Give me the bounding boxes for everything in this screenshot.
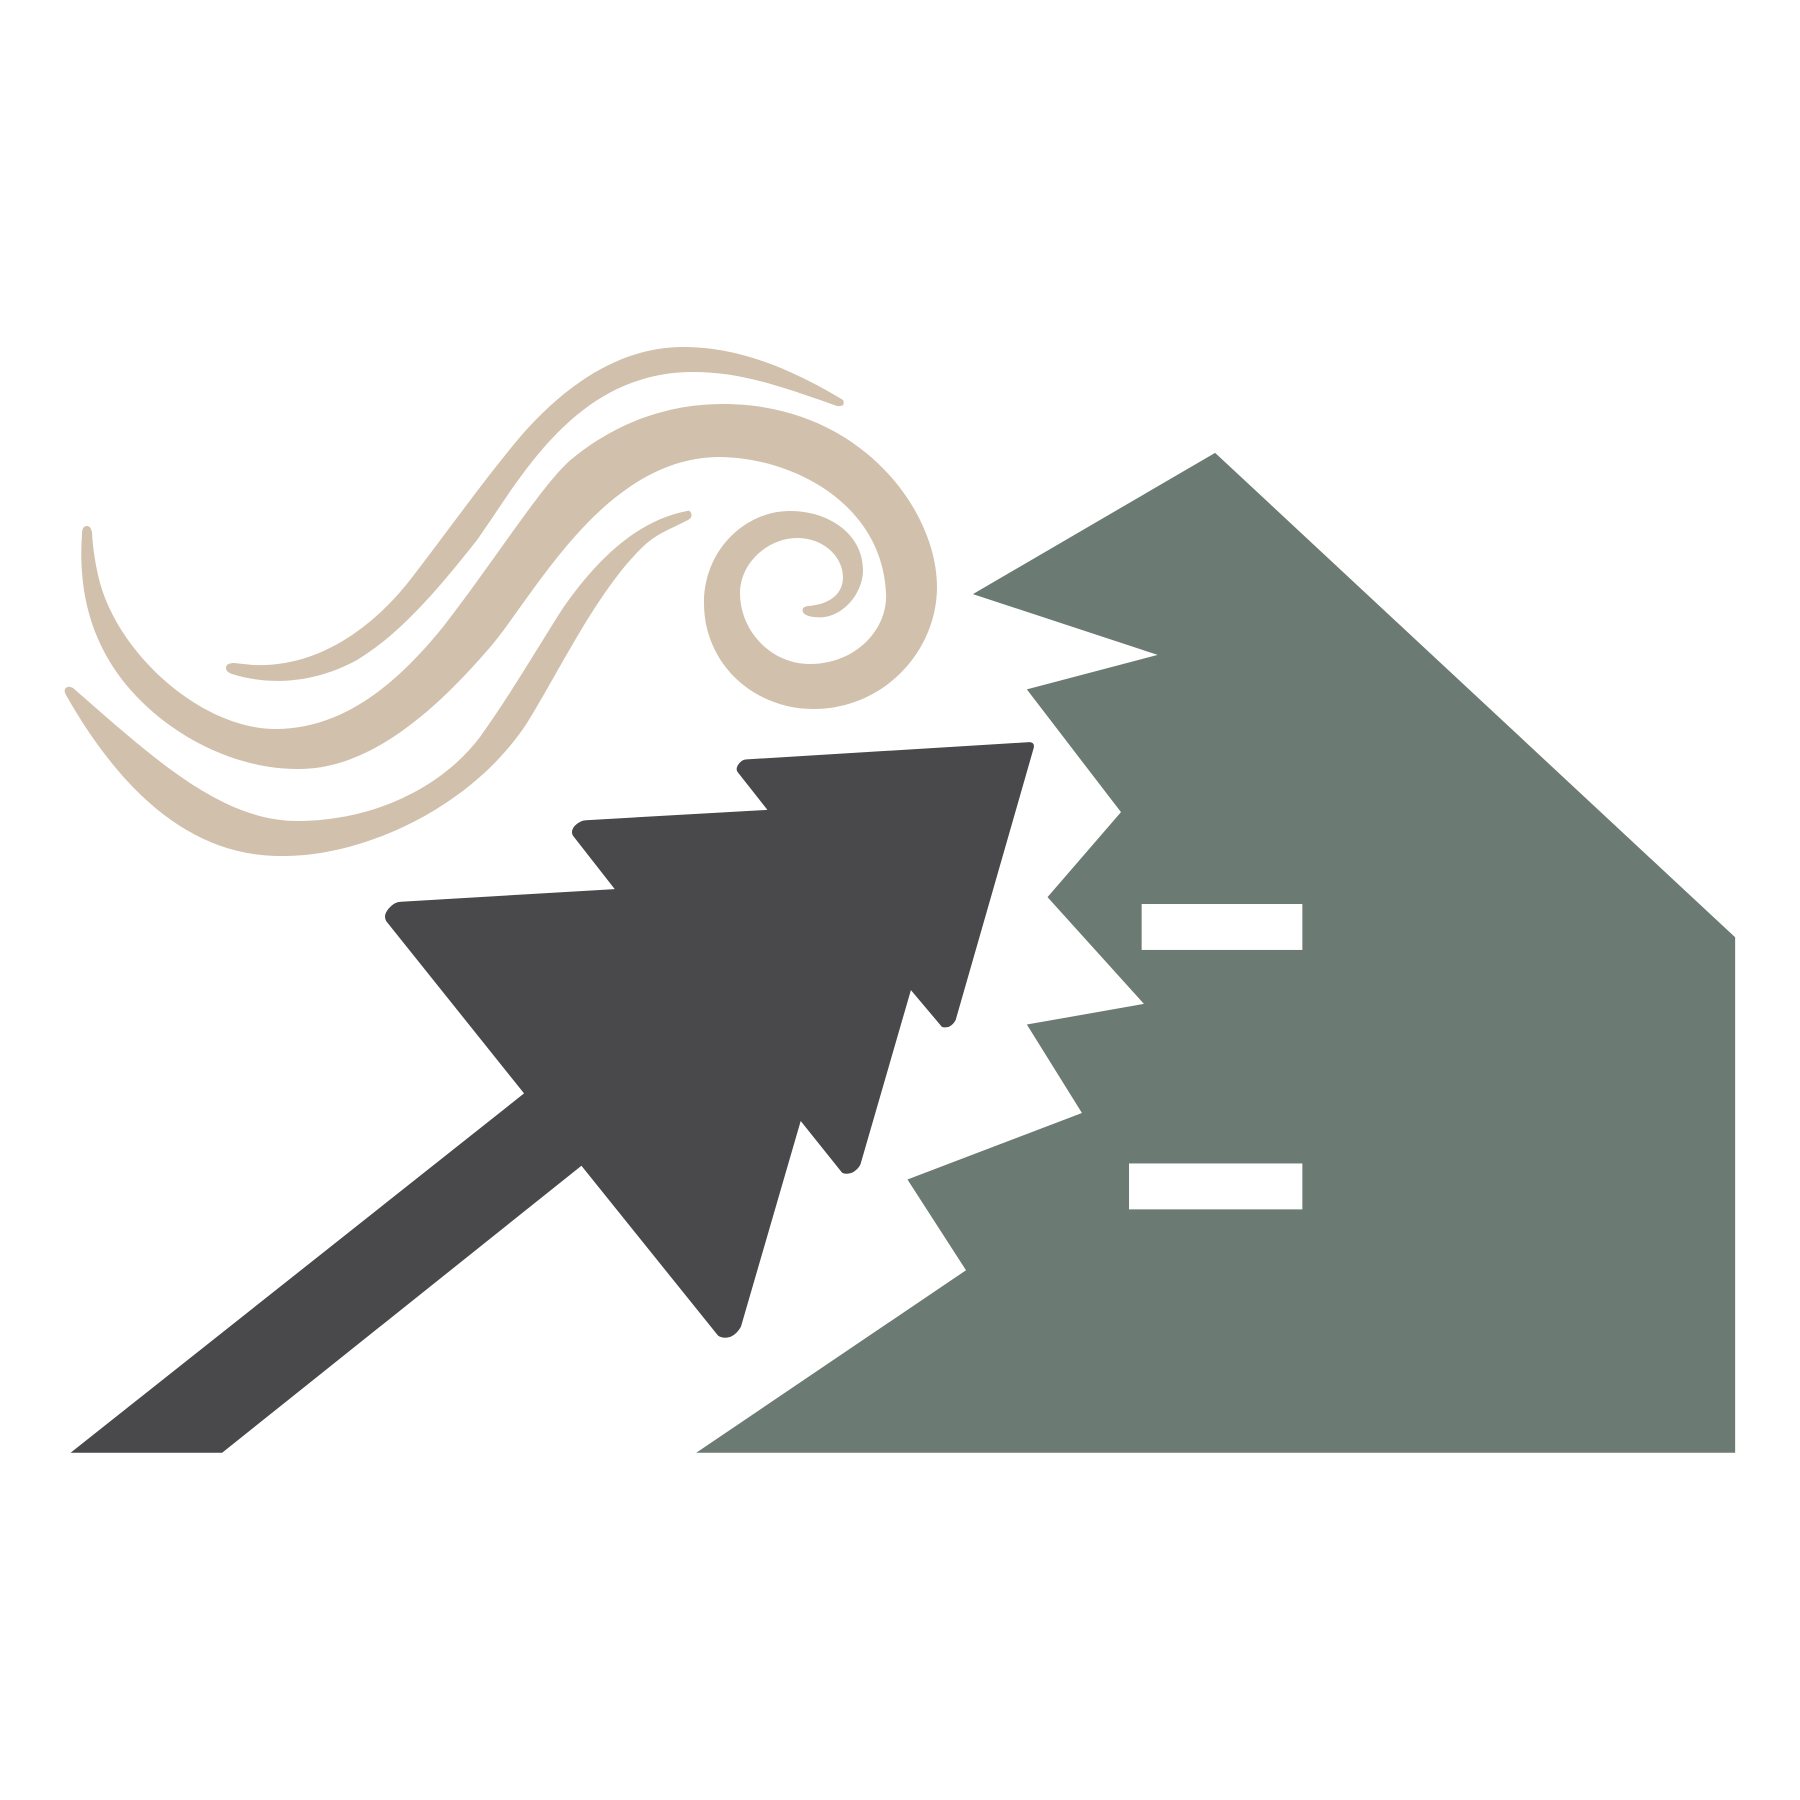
building with broken wall (696, 453, 1735, 1453)
wind gust: bottom (65, 511, 692, 856)
arrow: tree-shaped debris arrow (71, 742, 1034, 1453)
wind gust: middle with spiral (81, 404, 937, 769)
icon: wind swirls (65, 347, 937, 856)
building silhouette (696, 453, 1735, 1453)
wind gust: top (226, 347, 844, 681)
window: upper (1142, 904, 1302, 950)
window: lower (1129, 1163, 1302, 1209)
